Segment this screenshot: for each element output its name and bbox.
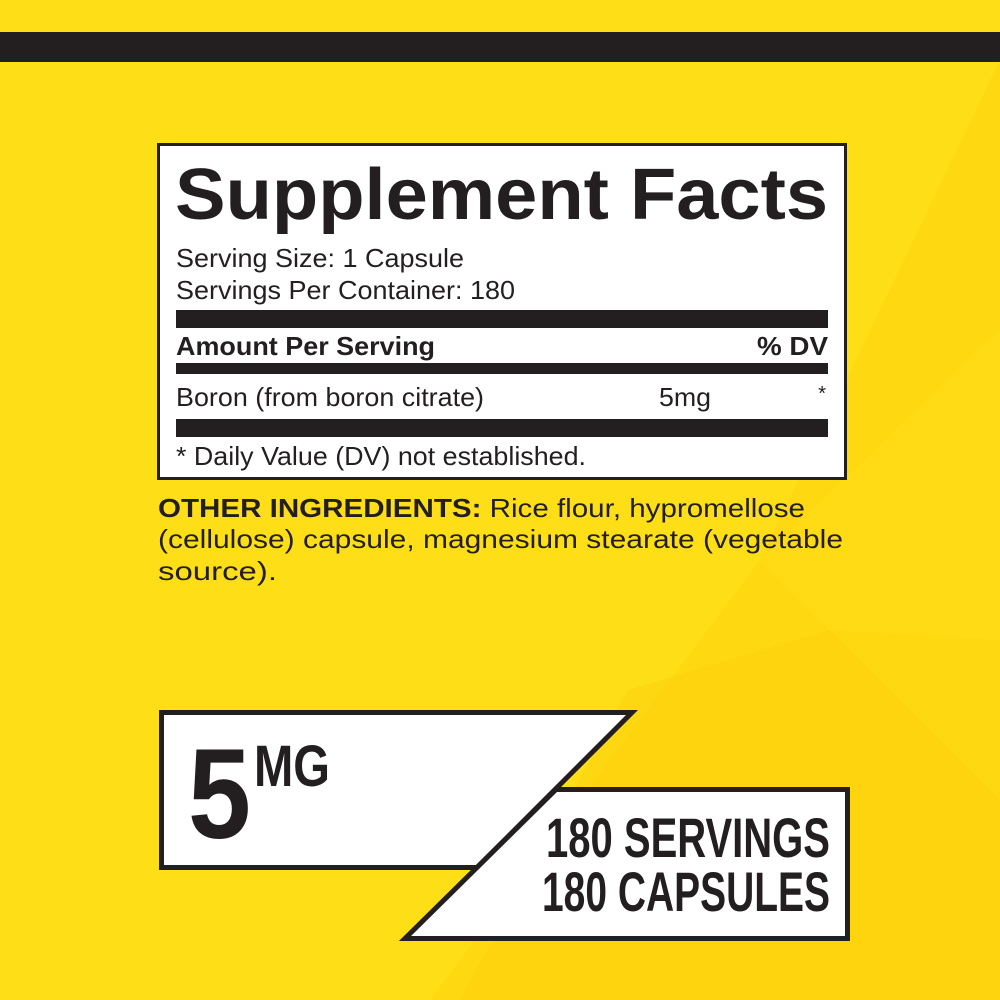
top bar [0, 32, 1000, 62]
servings per container: Servings Per Container: 180 [176, 275, 515, 305]
badge: servings: 180 SERVINGS [546, 806, 830, 869]
other ingredients: source). [158, 556, 277, 586]
boron row: * [818, 383, 826, 405]
other ingredients: OTHER INGREDIENTS: Rice flour, hypromellose [158, 493, 805, 523]
serving size: Serving Size: 1 Capsule [176, 243, 464, 273]
panel: supplement facts [158, 144, 846, 478]
badge: servings [405, 790, 848, 938]
title: Supplement Facts [175, 155, 828, 235]
boron row [176, 382, 826, 412]
header row [176, 331, 829, 361]
badge: 5mg: 5 [188, 723, 251, 866]
footnote: * Daily Value (DV) not established. [176, 441, 586, 471]
header row: % DV [757, 331, 829, 361]
header row: Amount Per Serving [176, 331, 435, 361]
other ingredients: (cellulose) capsule, magnesium stearate (vegetable [158, 524, 843, 554]
badge: servings: 180 CAPSULES [542, 860, 830, 923]
boron row: 5mg [659, 382, 711, 412]
other ingredients [158, 493, 843, 586]
badge: 5mg [162, 712, 632, 868]
badge: 5mg: MG [254, 734, 330, 799]
boron row: Boron (from boron citrate) [176, 382, 484, 412]
